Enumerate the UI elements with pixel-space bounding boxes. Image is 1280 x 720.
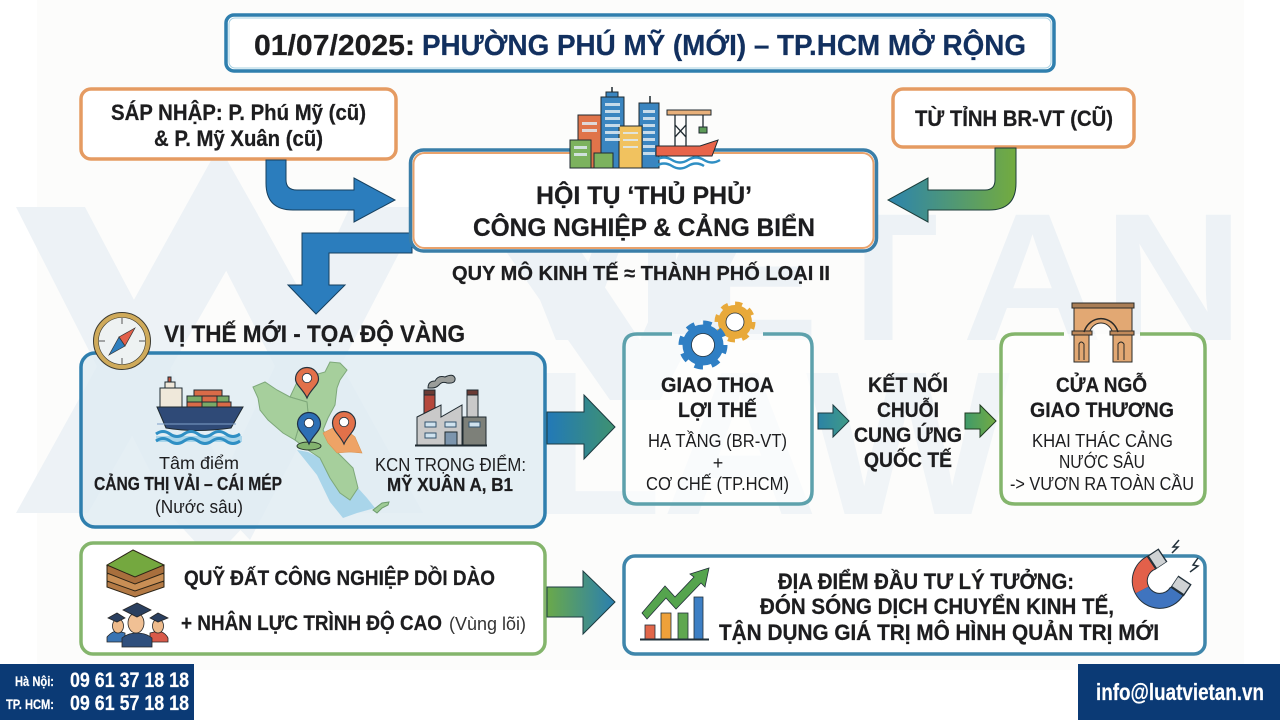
arrow: to supply chain (818, 405, 849, 437)
hub box (410, 150, 876, 251)
panel: investment destination: TẬN DỤNG GIÁ TRỊ MÔ HÌNH QUẢN TRỊ MỚI (719, 620, 1159, 645)
panel: land and workforce: + NHÂN LỰC TRÌNH ĐỘ CAO (181, 611, 442, 635)
title box: 01/07/2025: (254, 30, 415, 62)
box: merger source: SÁP NHẬP: P. Phú Mỹ (cũ) (111, 100, 366, 125)
arrow: position to synergy (547, 395, 615, 459)
panel: new position (81, 353, 545, 527)
footer: phone contacts: Hà Nội: (15, 674, 54, 689)
icon: land (107, 550, 164, 597)
panel: synergy: CƠ CHẾ (TP.HCM) (646, 473, 789, 494)
box: from BR-VT (893, 89, 1134, 147)
text: supply chain: CUNG ỨNG (854, 422, 962, 447)
icon: arch (1072, 303, 1134, 362)
watermark: Viet An Law (16, 146, 1244, 560)
panel: trade gateway (1001, 303, 1205, 504)
text: port: Tâm điểm (159, 453, 239, 473)
map (253, 362, 389, 518)
heading: new position: VỊ THẾ MỚI - TỌA ĐỘ VÀNG (164, 320, 465, 348)
footer: phone contacts: TP. HCM: (6, 697, 54, 712)
panel: investment destination: ĐỊA ĐIỂM ĐẦU TƯ LÝ TƯỞNG: (778, 569, 1074, 594)
panel: synergy: HẠ TẦNG (BR-VT) (648, 430, 787, 451)
panel: trade gateway: KHAI THÁC CẢNG (1032, 430, 1173, 451)
panel: investment destination (624, 540, 1205, 654)
arrow: hub down to position (288, 233, 412, 314)
text: port: CẢNG THỊ VẢI – CÁI MÉP (94, 473, 282, 494)
icon: factory (415, 375, 487, 446)
panel: synergy: LỢI THẾ (678, 397, 757, 422)
panel: trade gateway: GIAO THƯƠNG (1030, 398, 1174, 422)
footer: phone contacts: 09 61 57 18 18 (70, 691, 189, 715)
text: port: (Nước sâu) (155, 497, 243, 517)
panel: trade gateway: -> VƯƠN RA TOÀN CẦU (1010, 473, 1194, 494)
watermark: Viet An Law: VIET (505, 175, 938, 379)
panel: land and workforce (81, 543, 545, 654)
panel: trade gateway: CỬA NGỖ (1056, 371, 1147, 397)
pin: port (297, 412, 321, 450)
panel: investment destination: ĐÓN SÓNG DỊCH CHUYỂN KINH TẾ, (760, 594, 1114, 619)
footer: phone contacts (0, 664, 194, 720)
icon: compass (94, 312, 150, 370)
title box: PHƯỜNG PHÚ MỸ (MỚI) – TP.HCM MỞ RỘNG (422, 29, 1026, 62)
pin: east (332, 412, 356, 444)
footer: phone contacts: 09 61 37 18 18 (70, 668, 189, 692)
box: from BR-VT: TỪ TỈNH BR-VT (CŨ) (915, 106, 1113, 131)
panel: synergy (624, 304, 812, 504)
arrow: merger to hub (266, 160, 395, 222)
panel: land and workforce: (Vùng lõi) (449, 614, 526, 634)
icon: graduates (107, 603, 168, 647)
pin: north (296, 368, 318, 398)
panel: land and workforce: QUỸ ĐẤT CÔNG NGHIỆP DỒI DÀO (184, 566, 495, 590)
box: merger source (81, 89, 396, 159)
footer: email (1078, 664, 1280, 720)
text: supply chain (854, 371, 962, 472)
panel: synergy: GIAO THOA (661, 373, 774, 397)
hub box: HỘI TỤ ‘THỦ PHỦ’ (536, 180, 752, 210)
watermark: Viet An Law: LAW (530, 329, 1011, 558)
subtitle: economic scale: QUY MÔ KINH TẾ ≈ THÀNH PHỐ LOẠI II (452, 261, 830, 285)
panel: synergy: + (713, 453, 723, 473)
arrow: to gateway (965, 405, 996, 437)
text: industrial zones (375, 454, 526, 495)
watermark: Viet An Law: AN (962, 175, 1244, 379)
title box (226, 15, 1054, 71)
arrow: to investment (547, 571, 615, 634)
icon: ship (156, 377, 243, 444)
text: industrial zones: MỸ XUÂN A, B1 (387, 474, 513, 495)
text: industrial zones: KCN TRỌNG ĐIỂM: (375, 454, 526, 475)
text: supply chain: KẾT NỐI (868, 371, 948, 397)
text: supply chain: CHUỖI (877, 396, 939, 422)
icon: gears (681, 304, 753, 367)
icon: growth chart (640, 568, 709, 640)
hub box: CÔNG NGHIỆP & CẢNG BIỂN (473, 212, 815, 242)
icon: magnet (1140, 540, 1198, 601)
icon: city and port (570, 87, 720, 168)
panel: trade gateway: NƯỚC SÂU (1059, 451, 1145, 472)
text: port (94, 453, 282, 517)
box: merger source: & P. Mỹ Xuân (cũ) (154, 126, 323, 151)
arrow: BR-VT to hub (888, 148, 1016, 222)
text: supply chain: QUỐC TẾ (864, 446, 952, 472)
